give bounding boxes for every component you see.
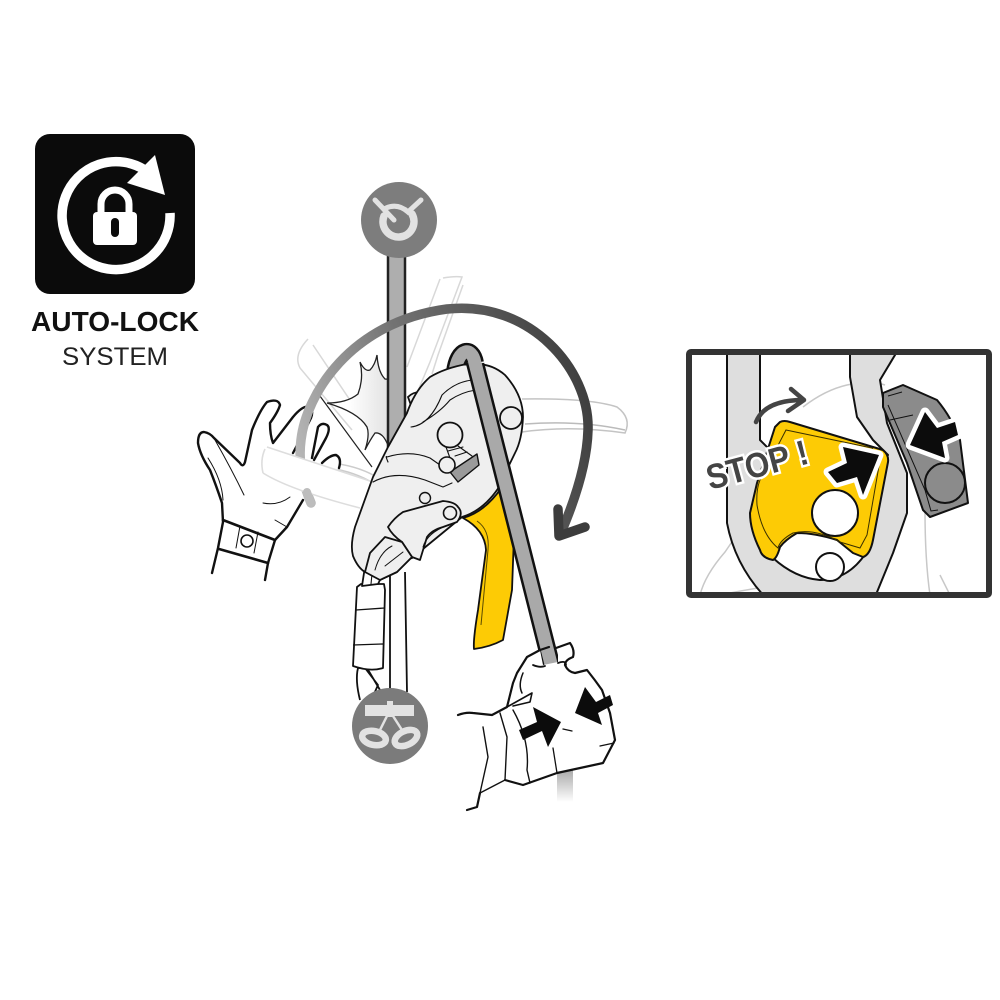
rope hook behind device: [455, 352, 475, 372]
rope below hand: [557, 770, 573, 802]
squeeze arrow right: [575, 687, 613, 725]
device body: [352, 364, 501, 580]
cam hole: [812, 490, 858, 536]
arc emerging below the band: [307, 492, 311, 503]
press arrow on cam: [828, 447, 879, 495]
small rotation arrow: [756, 389, 804, 422]
icon: rotation arrow: [62, 155, 170, 270]
ghost device outline: [700, 382, 950, 595]
grey pressing part: [883, 385, 968, 517]
right hand gripping rope: [458, 643, 615, 810]
squeeze arrow left: [519, 707, 561, 747]
slot: [450, 454, 479, 482]
lower pin: [816, 553, 844, 581]
yellow brake handle: [463, 487, 514, 649]
ghost handle band edges: [262, 447, 373, 508]
press arrow on grey part: [910, 412, 958, 458]
cam bottom: [773, 530, 866, 580]
lower carabiner and sling: [353, 537, 412, 700]
yellow cam: [750, 421, 888, 560]
rope hook fill: [455, 352, 475, 372]
device rear plate: [408, 364, 523, 490]
left hand: [198, 401, 340, 580]
inset frame: [689, 352, 989, 595]
auto-lock badge: [35, 134, 195, 294]
harness symbol: [352, 688, 428, 764]
upper rope: [388, 255, 405, 455]
rotation arrow: [300, 308, 588, 536]
anchor symbol: [361, 182, 437, 258]
side plate: [388, 501, 461, 560]
ghost handle band: [261, 447, 375, 512]
becket: [365, 537, 412, 580]
impact burst: [327, 355, 398, 450]
icon: padlock: [93, 190, 137, 245]
badge title: AUTO-LOCK: AUTO-LOCK: [31, 306, 199, 337]
braking rope: [467, 360, 559, 668]
inset panel: stop detail: [689, 350, 989, 597]
carabiner: [727, 350, 907, 597]
badge background: [35, 134, 195, 294]
ghost positions of the handle: [298, 277, 627, 508]
STOP label: STOP !: [702, 433, 813, 498]
dark ghost edge: [317, 392, 372, 467]
badge subtitle: SYSTEM: SYSTEM: [62, 343, 168, 371]
